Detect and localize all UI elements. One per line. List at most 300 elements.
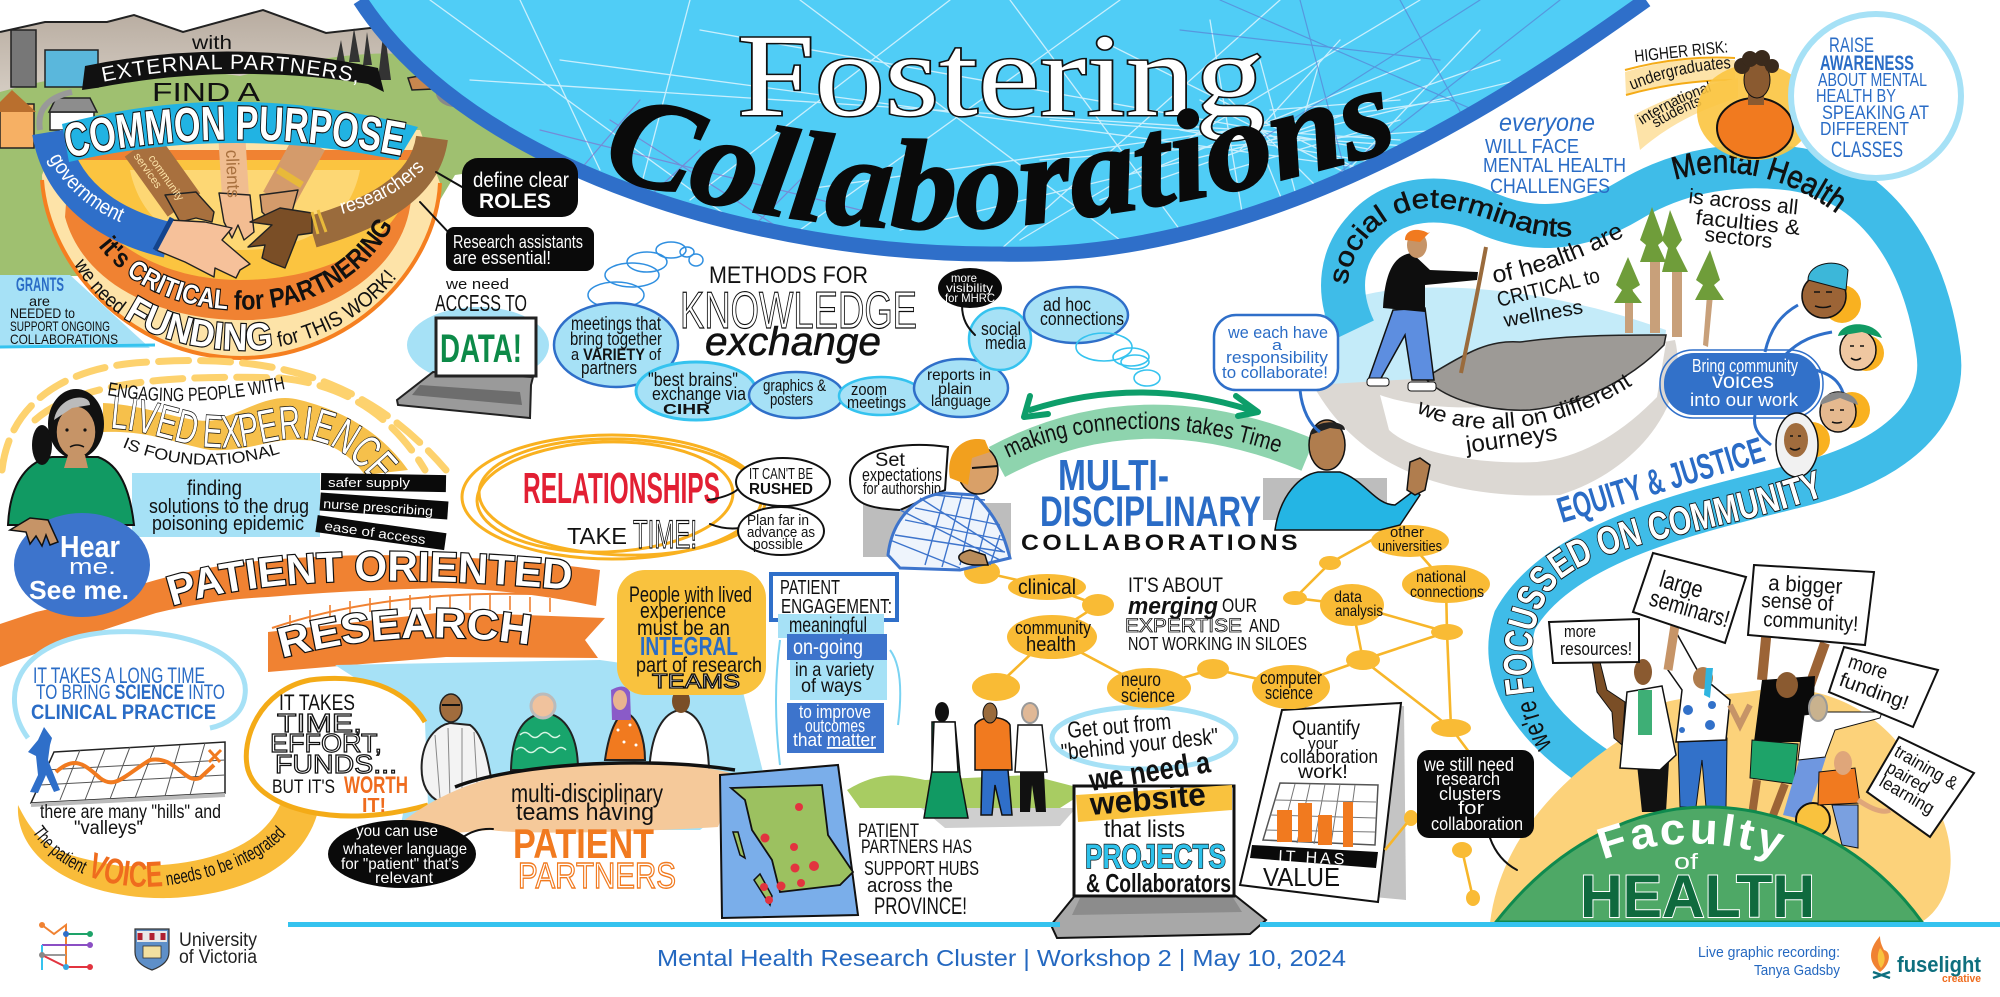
panel: website laptop: that lists [1104,816,1185,843]
panel: access to data: we need [445,276,509,293]
chart: hills and valleys [31,742,225,805]
heading: collaborations: COLLABORATIONS [1021,530,1301,555]
figure: older person in white coat [1015,703,1047,812]
bubble: best brains: "best brains" [648,370,738,391]
bubble: meetings: partners [581,358,637,378]
bubble: best brains: CIHR [663,401,710,418]
callout: raise awareness: HEALTH BY [1816,86,1896,106]
strip: safer supply: safer supply [328,475,411,490]
node: national connections [1402,565,1490,603]
callout: more visibility for MHRC: more [951,271,977,285]
callout: it can't be rushed: RUSHED [749,481,813,498]
panel: grants: NEEDED to [10,305,75,321]
text: across all faculties: sectors [1703,223,1774,253]
heading: methods for: METHODS FOR [709,262,868,289]
figure: woman in orange meditating [1697,50,1813,160]
panel: higher risk [1624,37,1736,150]
callout: research assistants: Research assistants [453,232,583,252]
logo: university of victoria shield [135,929,169,970]
callout: responsibility: responsibility [1226,348,1329,367]
hiker [1367,230,1486,391]
panel: higher risk: international [1636,81,1711,124]
sign: training and paired learning: training & [1891,741,1962,793]
text: of health are critical: wellness [1501,296,1585,332]
text: everyone will face challenges: everyone [1499,109,1595,137]
panel: methods for knowledge exchange [554,242,1160,420]
label: community services: services [131,151,164,191]
bubble: ad hoc connections: connections [1040,309,1124,329]
text: everyone will face challenges [1483,109,1626,198]
panel: patient engagement: ENGAGEMENT: [781,596,892,618]
item: meaningful: meaningful [789,614,867,637]
arm: partner with watch [278,142,310,200]
text: merging expertise [1125,574,1307,654]
text: hills and valleys [40,802,221,839]
text: everyone will face challenges: MENTAL HEALTH [1483,155,1626,177]
callout: define clear roles [436,158,578,217]
speech ring: time effort funds [246,678,428,817]
sign: a bigger sense of community: community! [1763,608,1859,636]
box: finding solutions: finding [187,477,242,500]
speech ring: time effort funds: WORTH [344,772,408,799]
callout: research clusters: clusters [1439,784,1501,804]
logo: fuselight creative: fuselight [1897,952,1982,977]
callout: research assistants: are essential! [453,248,551,268]
callout: get out from behind your desk: "behind your desk" [1060,723,1220,765]
panel: website laptop: website [1087,776,1207,822]
panel: higher risk: undergraduates [1630,58,1730,90]
bubble: best brains: exchange via [652,384,747,404]
circle: hear me, see me: me. [69,554,116,579]
text: partners: PARTNERS [518,855,676,896]
bubble: best brains [636,362,756,420]
logo: mental health research cluster [39,922,93,970]
text: multi-disciplinary teams having: teams having [516,799,654,826]
panel: community voices: Bring community [1692,356,1798,376]
callout: set expectations [850,445,948,510]
callout: it can't be rushed [708,458,830,528]
text: critical for partnering: it's CRITICAL for PARTNERING [99,219,390,310]
text: multi-disciplinary teams having: multi-disciplinary [511,778,663,808]
sign: training and paired learning [1867,737,1974,837]
arm: researchers [312,138,432,232]
trees [1614,207,1724,347]
bubble: meetings: meetings that [571,314,662,335]
landscape: mountains, city and green hills [0,10,567,276]
text: multi-disciplinary teams having [511,778,663,826]
sign: a bigger sense of community [1748,565,1874,645]
speech ring: time effort funds: TIME, [277,708,362,738]
text: merging expertise: NOT WORKING IN SILOES [1128,634,1307,654]
sign: more resources [1549,619,1639,663]
sign: training and paired learning: paired [1883,757,1933,797]
yellow wash [1490,688,1951,923]
arm: clients [232,140,236,205]
callout: research clusters: collaboration [1431,814,1523,834]
speech ring: time effort funds: EFFORT, [270,728,382,758]
title: Fostering: Fostering [737,10,1265,141]
text [31,663,225,724]
callout: plan far in advance: advance as [747,524,815,541]
callout: set expectations: expectations [862,465,942,485]
credit: live graphic recording: Tanya Gadsby [1754,963,1841,979]
text: different journeys: we are all on different [1419,374,1632,429]
callout: raise awareness: SPEAKING AT [1822,103,1929,124]
callout: people with lived experience: People with lived [629,582,752,607]
face: man with blue cap [1802,263,1861,323]
bubble: meetings: bring together [570,329,662,349]
panel: quantify your work: Quantify [1292,717,1360,740]
panel: map of province [720,765,858,918]
panel: grants: GRANTS [16,275,64,296]
strip: ease of access [315,515,446,550]
panel: website laptop: PROJECTS [1085,838,1226,876]
panel: relationships take time: TAKE [567,523,627,549]
text: merging expertise: EXPERTISE [1125,616,1242,637]
text: of health are critical [1494,226,1622,332]
text: social determinants: social determinants [1333,190,1572,284]
sign: large seminars: large [1656,566,1706,604]
item: on-going: on-going [793,636,863,659]
heading: disciplinary: DISCIPLINARY [1040,488,1261,536]
text: mental health: Mental Health [1671,152,1844,213]
strip: ease of access: ease of access [324,518,427,547]
box: finding solutions: poisoning epidemic [152,513,304,535]
panel: relationships take time: TIME! [633,513,697,557]
strip: it has [1250,845,1378,869]
figure: person with grey hair [1783,695,1882,820]
panel: website laptop [1051,744,1266,938]
node: neuroscience: science [1121,686,1175,707]
panel: website laptop: & Collaborators [1086,868,1231,898]
text: hills and valleys: "valleys" [74,818,143,839]
text: different journeys: journeys [1463,419,1559,459]
node: other universities: universities [1378,538,1442,555]
face: woman in hijab [1776,413,1830,477]
callout: responsibility: we each have [1227,323,1328,342]
callout: set expectations: Set [875,450,906,471]
text: university of victoria: of Victoria [179,947,257,968]
text: of health are critical: CRITICAL to [1495,264,1602,312]
white path [1380,343,1666,462]
text: making connections takes time: making connections takes Time [1004,412,1281,458]
sign: more funding: more [1845,651,1890,684]
dome: faculty of health: of [1674,849,1699,874]
label: clients: clients [222,149,244,198]
sign: large seminars: seminars! [1646,585,1733,633]
logo: fuselight creative [1871,936,1982,985]
text: merging expertise: merging [1128,593,1218,620]
dome: faculty of health: HEALTH [1580,863,1815,930]
table edge [455,763,735,787]
text: lived experience: LIVED EXPERIENCE [112,396,400,474]
panel: patient engagement: PATIENT [780,577,840,599]
panel: grants: are [29,293,50,309]
callout: it can't be rushed: IT CAN'T BE [749,466,813,483]
panel: higher risk: students [1652,98,1702,127]
text: across all faculties: faculties & [1694,206,1801,240]
text: IT TAKES A LONG TIME [33,663,205,688]
item: to improve outcomes: to improve [799,702,871,722]
panel: quantify your work: work! [1297,762,1348,783]
sign: training and paired learning: learning [1876,771,1938,818]
bubble: meetings [554,303,678,387]
heading: exchange: exchange [705,320,881,364]
callout: raise awareness: AWARENESS [1820,52,1914,75]
footer rule [288,922,2000,927]
node: national connections: connections [1410,584,1484,601]
callout: more visibility for MHRC [938,268,1002,335]
panel: grants [0,275,155,348]
callout: raise awareness: ABOUT MENTAL [1818,70,1927,90]
panel: community voices: into our work [1690,390,1799,410]
callout: whatever language: whatever language [342,841,467,858]
text: hills and valleys: there are many "hills" and [40,802,221,823]
blue wash [335,660,765,830]
sign: more resources: resources! [1560,639,1632,659]
bubble: reports in plain language: language [931,393,991,410]
ribbon: patient oriented: PATIENT ORIENTED [165,550,572,607]
panel: relationships take time [462,434,830,560]
bowl of funding and partnering bands [42,130,440,358]
figure: person in wheelchair [1796,751,1890,848]
speech ring: time effort funds: BUT IT'S [272,777,335,798]
circle: hear me, see me: See me. [29,575,129,605]
heading: knowledge: KNOWLEDGE [680,282,917,340]
text: patient partners support hubs: PROVINCE! [874,893,967,920]
node: community health [1007,615,1097,659]
text: patient: PATIENT [513,820,654,867]
bar chart [1263,783,1378,847]
panel: higher risk: HIGHER RISK: [1633,37,1729,66]
panel: website laptop: we need a [1086,744,1213,798]
node: computer science: science [1265,683,1313,703]
icon: hand on circle [10,518,58,546]
callout: plan far in advance [738,507,824,555]
ribbon: patient oriented [0,550,600,667]
banner: external partners: EXTERNAL PARTNERS, [102,54,357,86]
figure: man with glasses [888,439,1010,570]
heading: multi-: MULTI- [1058,451,1169,500]
panel: grants: SUPPORT ONGOING [10,318,110,334]
node: data analysis [1320,584,1384,626]
text: CLINICAL PRACTICE [31,701,216,724]
text: across all faculties [1687,185,1801,253]
node: computer science: computer [1260,668,1322,688]
sign: more funding: funding! [1836,669,1911,714]
box: finding solutions [132,473,320,537]
bubble: zoom meetings: meetings [847,393,906,412]
speech curve [14,632,245,738]
node: other universities [1371,524,1449,557]
text: TO BRING SCIENCE INTO [36,681,225,704]
panel: relationships take time: RELATIONSHIPS [523,464,720,513]
speech ring: time effort funds: IT! [362,795,386,817]
text: patient partners support hubs: PARTNERS HAS [861,837,972,858]
arm: community services [141,145,184,205]
sign: a bigger sense of community: a bigger [1768,570,1843,599]
item: in a variety of ways: of ways [801,676,862,697]
ground wash [1313,340,1678,496]
arm: government [50,132,168,240]
panel: access to data: ACCESS TO [435,290,527,316]
bubble: graphics and posters: graphics & [763,376,827,395]
thought bubbles left [588,242,703,308]
text: merging expertise: IT'S ABOUT [1128,574,1223,597]
bubble: meetings: a VARIETY of [571,345,661,364]
text: we need funding: we need FUNDING for THIS WORK! [75,258,396,352]
banner text: we're focussed on community: we're FOCUSSED ON COMMUNITY [1502,469,1818,752]
callout: whatever language [328,820,493,888]
label: researchers: researchers [340,162,424,214]
title: Collaborations: Collaborations [610,92,1391,231]
panel: community and faculty of health [1417,469,1976,930]
chart: multidisciplinary network [964,524,1490,906]
nodes [964,556,1480,906]
callout: whatever language: for "patient" that's [341,856,459,873]
node: data analysis: analysis [1335,603,1383,620]
item: in a variety of ways: in a variety [795,660,874,681]
text: everyone will face challenges: CHALLENGES [1490,175,1610,198]
figure: woman in green top [511,694,578,770]
text: patient partners support hubs: SUPPORT HUBS [864,858,979,880]
bubble: ad hoc connections: ad hoc [1043,295,1091,316]
strip: nurse prescribing: nurse prescribing [323,496,434,519]
band: common purpose: COMMON PURPOSE [64,105,406,158]
circle: hear me, see me [14,513,150,617]
title bowl with web of lines [360,0,1646,260]
node: neuroscience: neuro [1121,670,1161,691]
face: older person [1820,392,1870,432]
ribbon: research [268,592,605,672]
figure: woman with walker [924,702,968,818]
callout: responsibility [1214,315,1338,432]
item: to improve outcomes: outcomes [805,716,865,736]
callout: define clear roles: ROLES [479,190,551,213]
bubble: social media: social [981,319,1021,339]
label: government: government [46,154,124,222]
node: community health: community [1015,618,1091,638]
figure: woman behind doctor [1592,660,1625,745]
bubble: reports in plain language [914,359,1008,417]
icon: watch [278,170,302,185]
group: three people standing [847,702,1088,828]
bubble: social media [969,308,1031,370]
text: engaging people with: ENGAGING PEOPLE WITH [108,376,284,402]
callout: raise awareness: DIFFERENT [1820,119,1909,139]
text: patient partners support hubs: across the [867,875,953,897]
panel: people wash and multi-disciplinary table [246,660,765,896]
callout: raise awareness: RAISE [1829,34,1874,57]
band: patient voice: The patient VOICE needs to be integrated [34,824,286,887]
item: to improve outcomes: that matter [793,730,876,750]
callout: get out from behind your desk: Get out from [1066,708,1172,743]
strip: safer supply [321,473,446,492]
bubble: graphics and posters [749,372,843,418]
callout: raise awareness [1791,14,1961,178]
dome: faculty of health: Faculty [1596,814,1785,862]
text: university of victoria: University [179,930,257,951]
panel: making connections and multi-disciplinary [849,314,1431,572]
callout: people with lived experience: part of research [636,654,762,677]
thought bubbles right [1076,333,1160,386]
text: with: with [191,33,232,54]
text: different journeys [1419,374,1632,459]
figure: man in striped shirt [422,694,495,805]
figure: man in black shirt [1750,628,1825,818]
text: equity and justice: EQUITY & JUSTICE [1552,429,1769,531]
bubble: social media: media [985,333,1027,353]
callout: research clusters: for [1458,798,1484,818]
panel: patient engagement [771,574,900,765]
logo: fuselight creative: creative [1942,973,1981,985]
panel: right river and social determinants [1316,11,1964,778]
figure: person in flower shirt [1668,625,1750,807]
face: person with green hair [1838,324,1884,371]
callout: raise awareness: CLASSES [1831,137,1903,162]
callout: people with lived experience [617,570,766,695]
sign: a bigger sense of community: sense of [1761,589,1834,616]
figure: woman with purple hair [605,686,645,760]
callout: more visibility for MHRC: visibility [946,281,993,295]
callout: research clusters [1417,750,1534,870]
node: data analysis: data [1334,589,1362,606]
figure: woman waving [1263,420,1430,530]
light blue wash [1320,288,1666,385]
mint band [997,422,1308,462]
bubble: reports in plain language: plain [938,381,972,398]
figure: person in white coat [1620,659,1676,812]
text: everyone will face challenges: WILL FACE [1485,136,1579,158]
callout: get out from behind your desk [1052,707,1236,769]
callout: responsibility: a [1272,337,1283,354]
callout: research clusters: research [1436,769,1500,789]
panel backing grey left [863,503,1011,557]
callout: people with lived experience: experience [640,598,726,623]
strip: it has: IT HAS [1278,848,1348,869]
bubble: ad hoc connections [1024,287,1128,343]
node: clinical: clinical [1018,576,1076,599]
text: value: VALUE [1263,862,1340,892]
node: computer science [1252,665,1330,709]
text: university of victoria [179,930,257,968]
text: find a: FIND A [152,77,261,107]
panel: quantify your work: your [1308,734,1338,753]
panel: lived experience [0,357,450,617]
river [1343,166,1939,790]
figure: man in white [649,689,709,777]
text: merging expertise: AND [1249,616,1280,636]
circle: hear me, see me: Hear [60,529,120,564]
bubble: zoom meetings [839,377,923,415]
figure: walking person [28,727,60,793]
speech ring: time effort funds: IT TAKES [279,690,355,715]
dashed halo [2,361,446,470]
speech ring: time effort funds: FUNDS... [275,749,397,779]
ribbon [103,398,408,475]
panel: grants: COLLABORATIONS [10,331,118,347]
rock [1425,335,1666,410]
callout: set expectations: for authorship [863,479,941,498]
bubble: reports in plain language: reports in [927,367,991,384]
text: is foundational: IS FOUNDATIONAL [124,438,280,465]
table [402,763,738,835]
callout: people with lived experience: INTEGRAL [640,631,738,661]
node: neuroscience [1107,668,1191,708]
callout: whatever language: you can use [356,823,438,840]
callout: research assistants [420,202,594,271]
sign: large seminars [1633,553,1746,643]
